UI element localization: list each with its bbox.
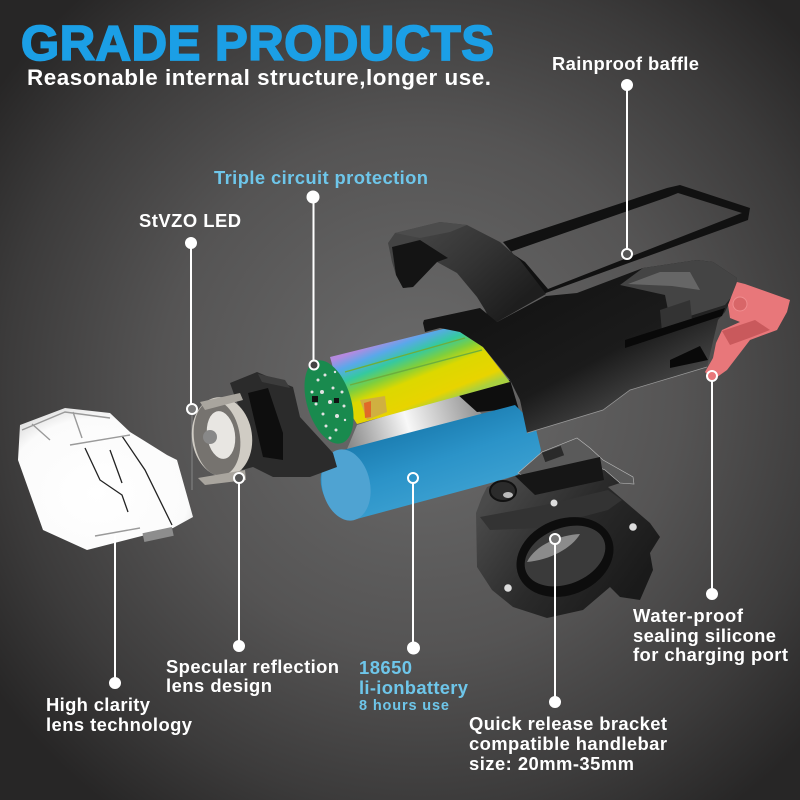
subtitle: Reasonable internal structure,longer use. [27,65,491,90]
label: bracket: Quick release bracket [469,713,667,734]
silicone port plug [705,282,790,380]
body inner shadow [457,380,525,430]
battery [315,405,541,525]
label: high clarity: lens technology [46,714,193,735]
leader: bracket [550,534,560,707]
leader: battery [408,473,419,654]
circuit heatsink rainbow [330,328,510,424]
leader: silicone [707,371,717,599]
label: triple circuit protection: Triple circuit protection [214,167,428,188]
label: silicone [633,605,788,665]
rainproof baffle [388,185,750,322]
LED holder [230,372,337,477]
leader: high clarity [110,535,120,688]
label: silicone: sealing silicone [633,625,776,646]
label: specular reflection: Specular reflection [166,656,339,677]
label: bracket: compatible handlebar [469,733,667,754]
main body [423,260,737,433]
leader: triple circuit protection [308,192,318,370]
leader: rainproof baffle [622,80,632,259]
label: high clarity: High clarity [46,694,151,715]
label: high clarity [46,694,193,735]
label: battery [359,657,469,714]
white cell wrap [345,393,495,454]
lens cover [18,408,193,550]
bracket [476,438,660,618]
label: silicone: Water-proof [633,605,744,626]
label: bracket: size: 20mm-35mm [469,753,634,774]
label: rainproof baffle: Rainproof baffle [552,53,699,74]
label: battery: li-ionbattery [359,677,469,698]
label: battery: 8 hours use [359,698,449,714]
label: battery: 18650 [359,657,412,678]
reflector lens [187,393,257,490]
circuit board [295,354,363,450]
label: specular reflection: lens design [166,675,272,696]
label: silicone: for charging port [633,644,788,665]
leader: specular reflection [234,473,244,651]
leader: StVZO LED [186,238,197,414]
title: GRADE PRODUCTS [21,17,494,71]
label: StVZO LED: StVZO LED [139,210,241,231]
label: bracket [469,713,667,774]
label: specular reflection [166,656,339,696]
